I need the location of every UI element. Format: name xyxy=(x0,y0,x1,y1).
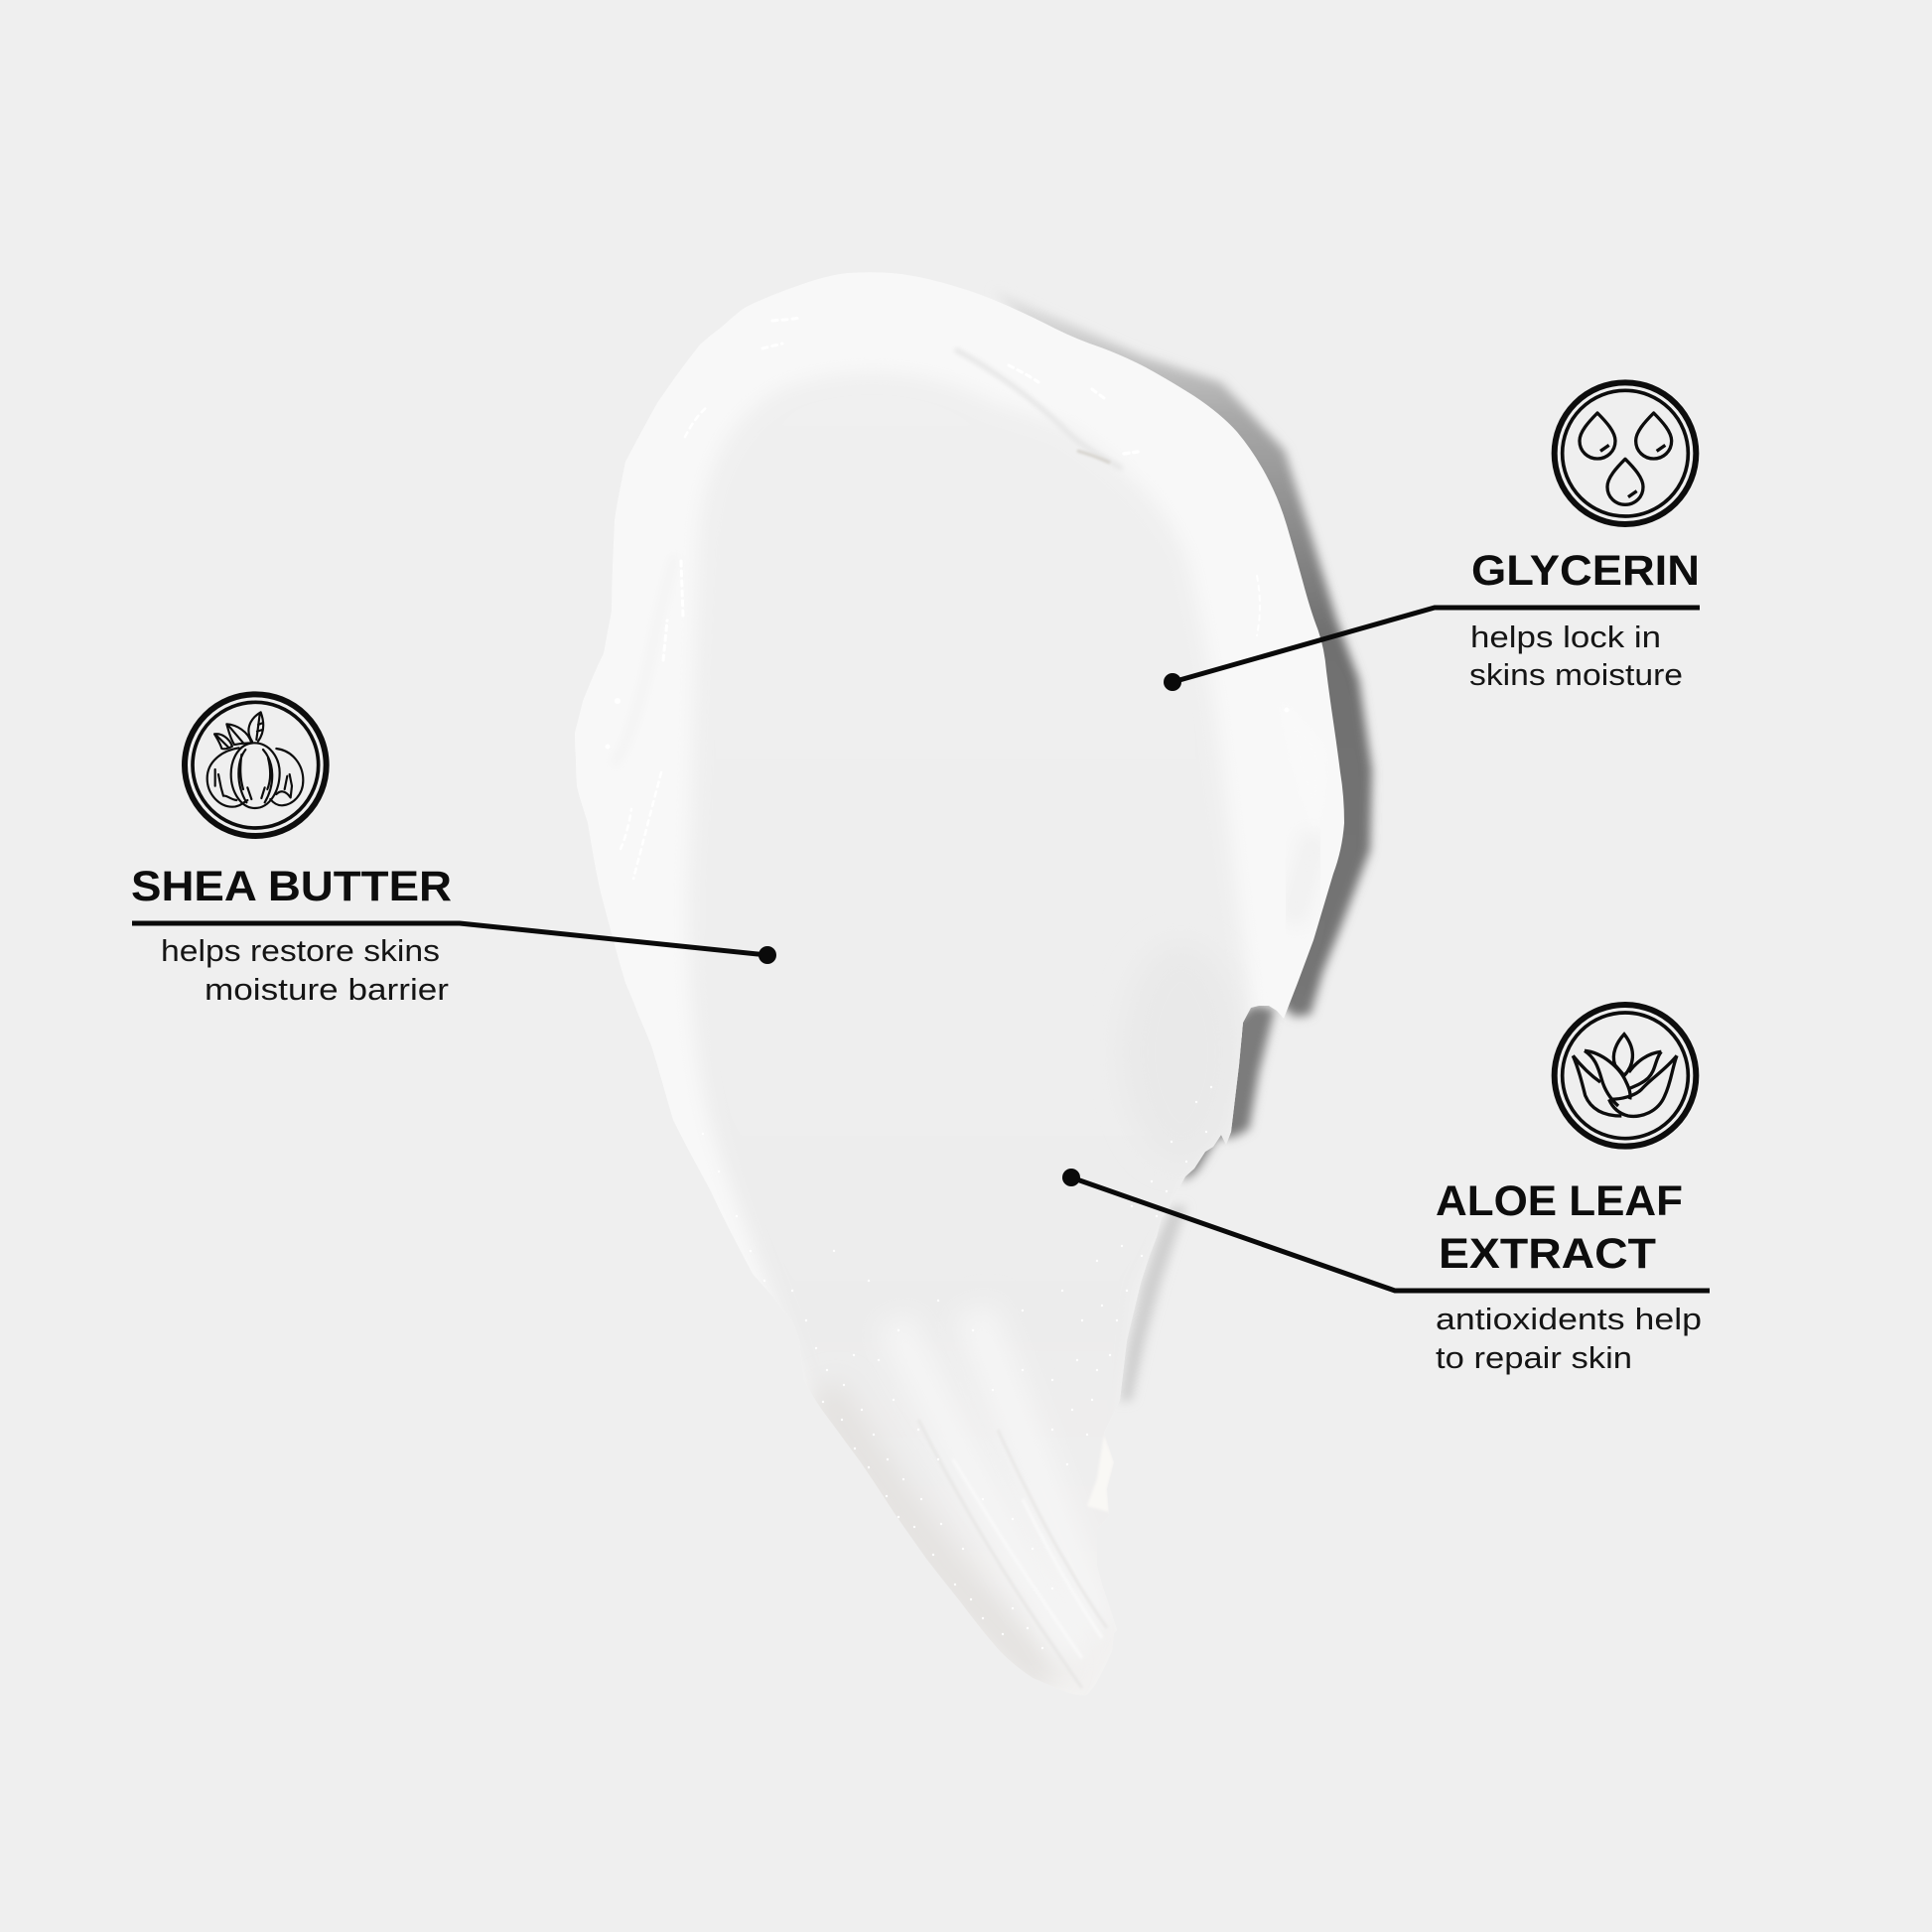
heading: ALOE LEAF xyxy=(1436,1177,1683,1225)
upper fold line xyxy=(955,349,1122,469)
callout: shea butter xyxy=(131,694,776,1007)
swatch body xyxy=(575,272,1344,1695)
leader dot xyxy=(1062,1169,1080,1186)
icon: shea nuts xyxy=(185,694,327,836)
cream swatch xyxy=(575,272,1344,1708)
leader line xyxy=(1173,608,1700,682)
description line 2: to repair skin xyxy=(1436,1340,1632,1375)
left rim crease xyxy=(614,556,675,764)
sparkle particles xyxy=(703,1087,1211,1648)
heading line 2: EXTRACT xyxy=(1439,1230,1656,1278)
icon: aloe plant xyxy=(1555,1005,1696,1147)
torn edge fleck xyxy=(1089,1441,1112,1510)
callout: aloe leaf extract xyxy=(1062,1005,1710,1375)
right rim soft fold xyxy=(1279,695,1326,834)
leader dot xyxy=(759,946,776,964)
callout: glycerin xyxy=(1164,382,1700,692)
heading: SHEA BUTTER xyxy=(131,863,452,910)
description: helps restore skins xyxy=(161,933,440,968)
description: helps lock in xyxy=(1470,620,1661,654)
description line 2: skins moisture xyxy=(1469,657,1683,692)
tail shading and brush streaks xyxy=(815,1395,1100,1682)
heading: GLYCERIN xyxy=(1471,547,1700,595)
torn edge darkening xyxy=(1237,1063,1239,1080)
gloss highlights xyxy=(680,563,683,586)
description: antioxidents help xyxy=(1436,1302,1702,1336)
cream shadow xyxy=(993,290,1372,1402)
infographic canvas xyxy=(132,272,1710,1680)
leader path xyxy=(1071,1177,1710,1291)
icon: water drops xyxy=(1555,382,1696,524)
description line 2: moisture barrier xyxy=(205,972,449,1007)
inner dish shading xyxy=(688,372,1250,1708)
leader dot xyxy=(1164,673,1181,691)
leader line xyxy=(132,923,767,955)
